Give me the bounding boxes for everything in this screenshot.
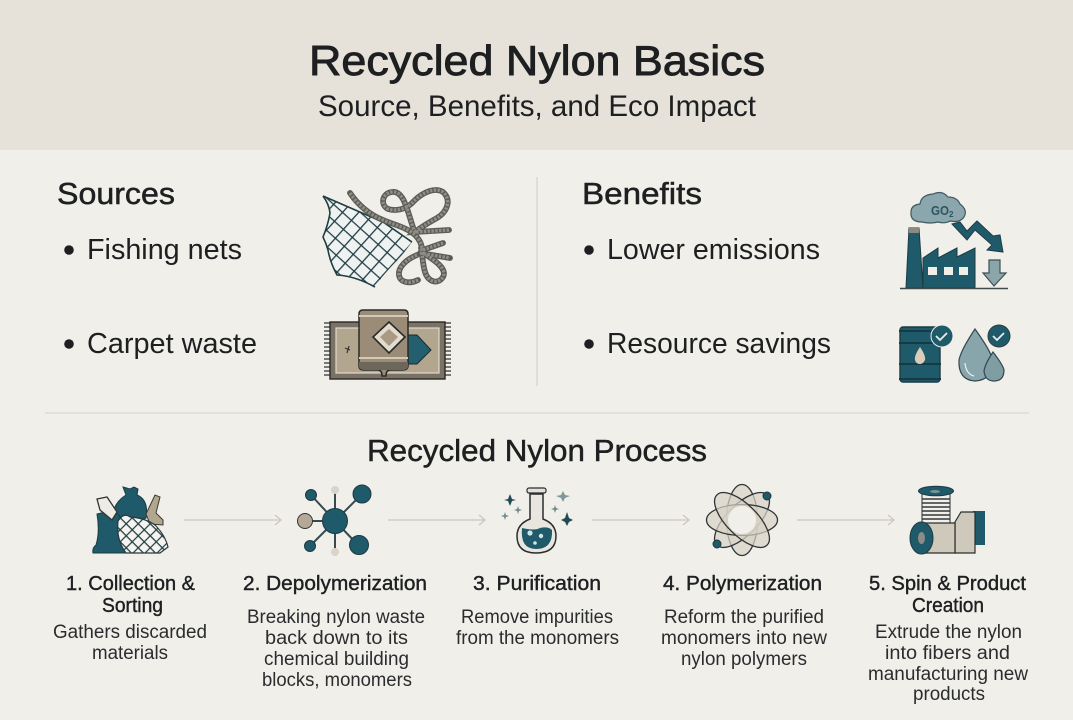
icon: factory with falling CO2: 2 [949,210,954,219]
arrow 2 [388,515,485,525]
step 4 text: nylon polymers [681,649,807,670]
step 4 text [661,573,827,670]
heading: process: Recycled Nylon Process [367,433,707,468]
heading: benefits: Benefits [582,176,702,211]
step 4 icon: polymer rings [706,484,778,556]
icon: factory with falling CO2: GO [931,203,949,218]
step 2 text: back down to its [265,628,408,649]
step 3 text [456,573,619,649]
icon: factory with falling CO2 [900,193,1008,288]
step 1 icon: waste bag and net [93,487,172,556]
icon: oil barrel and water drops [899,325,1010,382]
icon: fishing net and rope [315,190,450,290]
list item: carpet waste: Carpet waste [87,328,257,360]
step 2 text: Breaking nylon waste [247,607,425,628]
title: Recycled Nylon Basics [309,37,765,84]
heading: sources: Sources [57,176,175,211]
panel: benefits [582,176,1010,382]
list item: resource savings: Resource savings [607,328,831,360]
subtitle: Source, Benefits, and Eco Impact [318,90,756,123]
step 5 text: into fibers and [885,643,1010,664]
arrow 3 [592,515,689,525]
header band [0,0,1073,150]
step 4 text: monomers into new [661,628,827,649]
step 4 text: Reform the purified [664,607,824,628]
step 2 icon: molecule [298,485,371,556]
list item: fishing nets: Fishing nets [87,234,242,266]
arrow 4 [797,515,894,525]
step 3 text: 3. Purification [473,573,601,595]
step 5 text: Extrude the nylon [875,622,1022,643]
step 3 text: Remove impurities [461,607,613,628]
step 2 text [243,573,427,691]
step 4 text: 4. Polymerization [663,573,822,595]
list item: lower emissions: Lower emissions [607,234,820,266]
step 1 text: materials [92,643,168,664]
step 3 icon: flask [501,488,573,553]
step 5 text: 5. Spin & Product [869,573,1026,595]
step 1 text: Sorting [102,595,163,617]
step 1 text [53,573,207,664]
step 2 text: chemical building [264,649,409,670]
icon: carpet [324,310,451,379]
step 5 text: manufacturing new [868,664,1028,685]
panel: process [53,433,1028,705]
step 5 text: Creation [912,595,984,617]
step 5 text: products [913,684,985,705]
step 1 text: Gathers discarded [53,622,207,643]
step 5 text [868,573,1028,705]
step 5 icon: spool and roll [910,486,985,554]
step 2 text: blocks, monomers [262,670,412,691]
panel: sources [57,176,451,379]
step 1 text: 1. Collection & [66,573,196,595]
arrow 1 [184,515,281,525]
step 3 text: from the monomers [456,628,619,649]
step 2 text: 2. Depolymerization [243,573,427,595]
